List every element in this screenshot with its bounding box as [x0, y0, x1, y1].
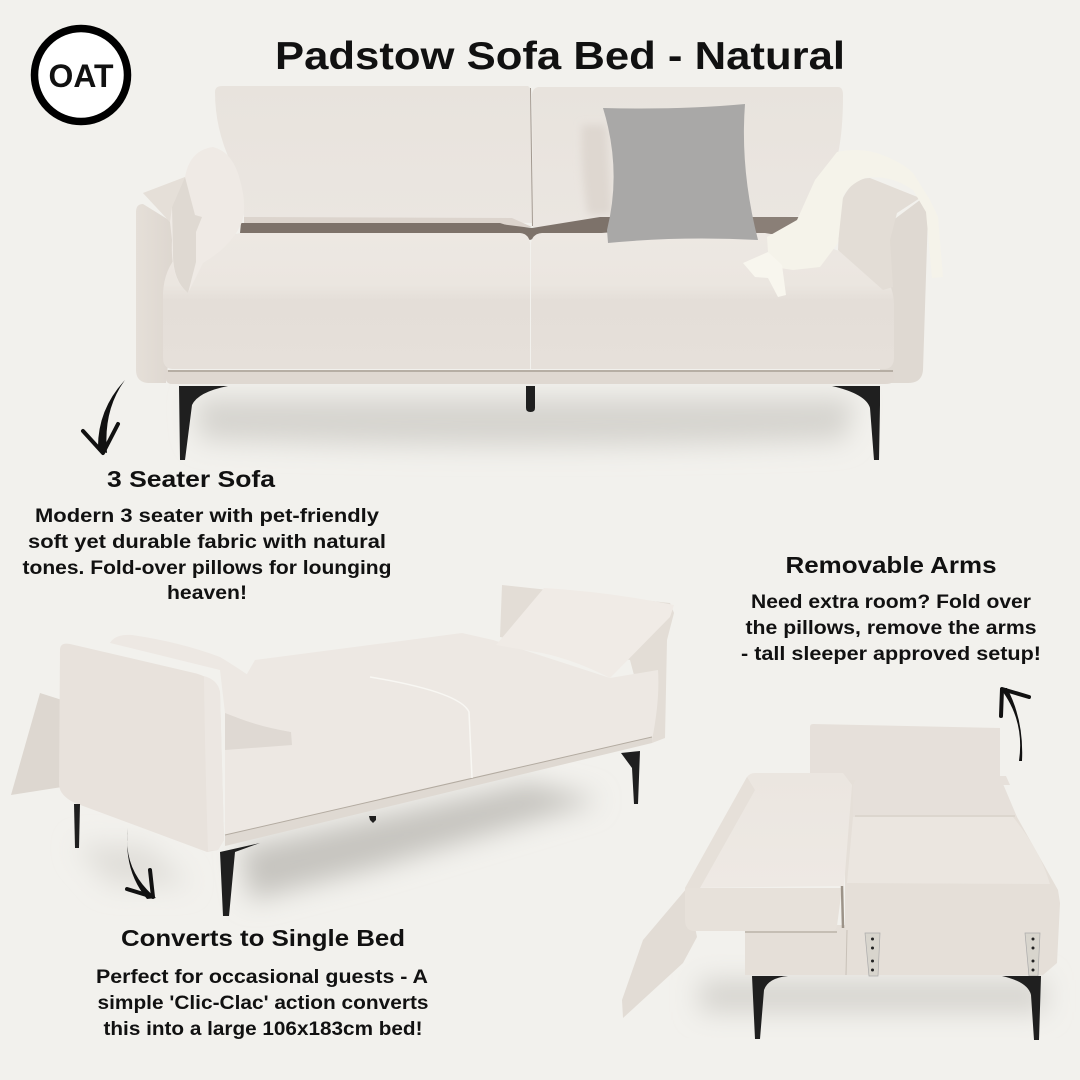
illustration: 3 seater sofa [136, 86, 943, 460]
illustration: sofa bed flat side view [11, 585, 674, 916]
text block: 3 seater sofa: Modern 3 seater with pet-friendly [35, 506, 379, 527]
text block: 3 seater sofa: soft yet durable fabric with natural [28, 532, 386, 553]
left front face [685, 888, 842, 931]
seat cushions [163, 233, 530, 369]
pillow on far arm [496, 588, 674, 678]
arrow: down-right to single bed [127, 828, 156, 899]
text block: converts to single bed: this into a large 106x183cm bed! [104, 1019, 422, 1040]
text block: removable arms: Removable Arms [786, 552, 996, 578]
arrow: down-left to 3 seater [83, 380, 125, 453]
text block: removable arms: the pillows, remove the arms [746, 618, 1036, 639]
pillow on near arm [110, 635, 308, 732]
grey pillow [603, 104, 758, 243]
sofa legs [179, 386, 228, 460]
hanging pillow [622, 888, 697, 1018]
left arm [136, 204, 185, 383]
text block: converts to single bed: Converts to Single Bed [121, 925, 405, 951]
shadow on seat beside arm [225, 712, 292, 750]
text block: removable arms: - tall sleeper approved setup! [741, 644, 1041, 665]
right arm [880, 200, 928, 383]
floor shadow [700, 980, 1045, 1012]
legs [752, 976, 788, 1039]
base strip [166, 370, 894, 384]
back panel [810, 724, 1010, 785]
logo: OAT [34, 28, 128, 122]
floor shadow [195, 398, 855, 446]
floor shadow [240, 783, 600, 900]
text block: 3 seater sofa: tones. Fold-over pillows for lounging [22, 558, 392, 579]
text block: converts to single bed: Perfect for occasional guests - A [96, 967, 428, 988]
pillow shadow on back [582, 125, 612, 215]
base strip [225, 737, 652, 846]
under-cushion strip [244, 217, 532, 227]
text block: converts to single bed [96, 925, 428, 1040]
seat silhouette [225, 633, 658, 836]
front seat right top [847, 817, 1050, 884]
logo: OAT: OAT [48, 58, 114, 94]
rear seat right [853, 772, 1017, 817]
seat seam [370, 677, 472, 778]
text block: 3 seater sofa [22, 466, 392, 604]
hanging pillow [11, 693, 62, 795]
seats silhouette right [745, 780, 1060, 975]
text block: removable arms [741, 552, 1041, 665]
brackets [865, 933, 880, 976]
text block: 3 seater sofa: 3 Seater Sofa [107, 466, 275, 492]
text block: removable arms: Need extra room? Fold over [751, 592, 1032, 613]
bed legs [220, 843, 260, 916]
text block: converts to single bed: simple 'Clic-Clac' action converts [98, 993, 428, 1014]
throw blanket [743, 150, 943, 297]
illustration: open sofa bed front view [622, 724, 1060, 1040]
near arm [59, 644, 224, 852]
right fold-over pillow [838, 178, 920, 290]
left fold-over pillow [143, 147, 244, 293]
far arm [500, 585, 674, 743]
arrow: up to removable arms [1000, 688, 1029, 761]
title: Padstow Sofa Bed - Natural [275, 35, 845, 78]
left folded seat top [685, 773, 852, 888]
text block: 3 seater sofa: heaven! [167, 583, 247, 604]
back cushions [215, 86, 532, 223]
